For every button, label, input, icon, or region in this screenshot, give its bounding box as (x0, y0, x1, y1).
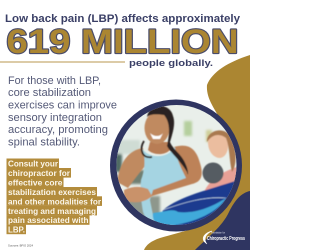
neck (148, 142, 170, 154)
gold background curve (144, 55, 250, 250)
main woman right arm (151, 144, 202, 196)
leggings (162, 180, 234, 225)
photo: women exercising (116, 105, 236, 225)
callout highlighted text: LBP. (8, 225, 25, 235)
source note: Sources: BFIO 2024 (8, 244, 33, 248)
main woman face (144, 112, 170, 144)
body text: accuracy, promoting (8, 124, 108, 136)
callout highlighted text: Consult your (8, 158, 59, 168)
big number 619 MILLION: 619 MILLION (6, 23, 239, 61)
body text (8, 75, 117, 148)
navy corner panel (195, 191, 250, 250)
callout highlighted text: pain associated with (8, 215, 88, 225)
heading line: Low back pain (LBP) affects approximately (5, 13, 240, 25)
callout highlighted text: chiropractor for (8, 168, 71, 178)
callout highlighted text: and other modalities for (8, 196, 102, 206)
hair (147, 106, 188, 174)
body text: For those with LBP, (8, 75, 101, 87)
body text: core stabilization (8, 87, 91, 99)
hand (124, 187, 152, 202)
body text: spinal stability. (8, 136, 80, 148)
logo: Foundation for Chiropractic Progress: Foundation for (211, 230, 225, 234)
infographic canvas (0, 13, 250, 250)
photo circle frame (110, 100, 244, 232)
main woman left arm (117, 148, 146, 188)
people globally: people globally. (129, 58, 213, 69)
gold divider (0, 62, 125, 63)
body text: sensory integration (8, 112, 102, 124)
main woman top (141, 147, 186, 226)
logo: Foundation for Chiropractic Progress (203, 230, 245, 244)
callout highlighted text: stabilization exercises (8, 187, 96, 197)
body text: exercises can improve (8, 100, 117, 112)
callout highlighted text: treating and managing (8, 206, 96, 216)
callout highlighted text: effective core (8, 178, 63, 188)
callout highlighted text (6, 158, 102, 235)
second woman (204, 166, 236, 192)
